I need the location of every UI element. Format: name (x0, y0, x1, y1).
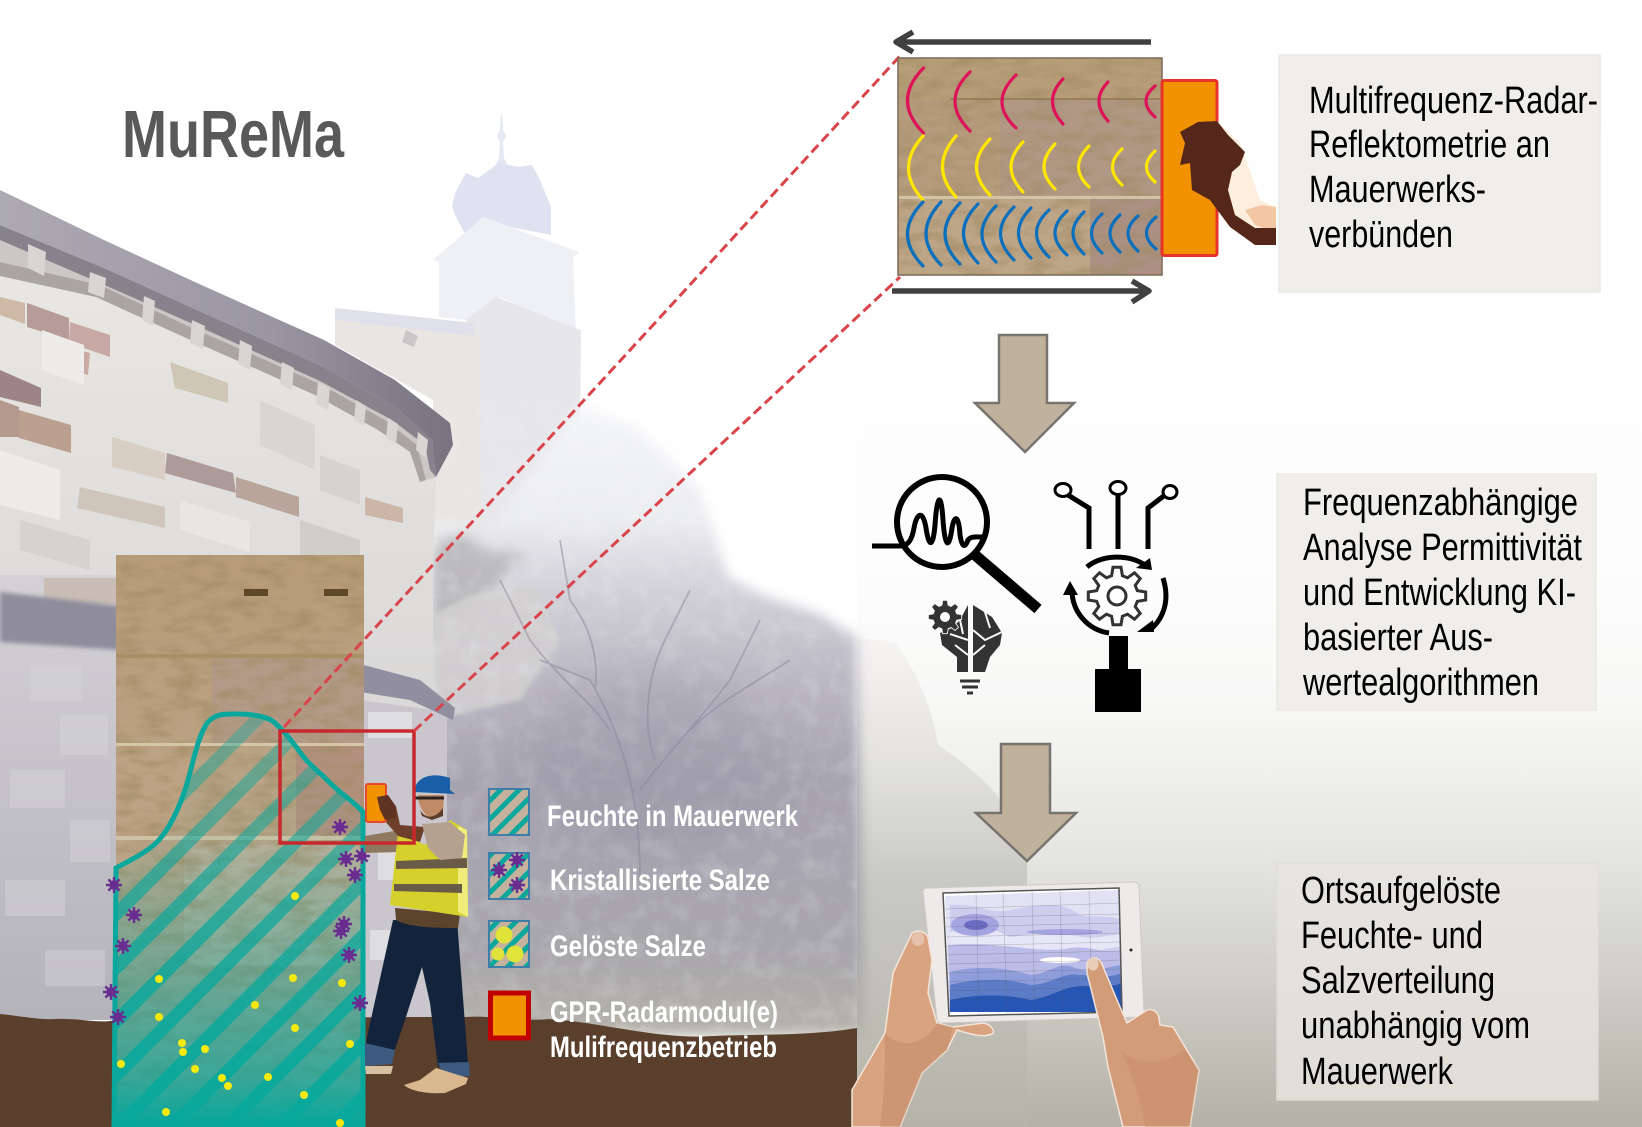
arrow: down 1 (975, 335, 1074, 452)
zoom projection lines (284, 56, 900, 731)
text box: radar reflectometry: verbünden (1309, 214, 1453, 256)
frieze band (0, 225, 436, 480)
lower bastion (360, 700, 447, 1020)
text box: analysis (1277, 474, 1596, 710)
bulb base (960, 681, 980, 693)
belt (395, 908, 460, 928)
legend: dissolved salts (489, 921, 706, 967)
blue waves (908, 202, 1156, 266)
left hemisphere (940, 605, 968, 672)
dissolved salts (117, 892, 354, 1127)
stone blocks (116, 555, 364, 1127)
tower spire (495, 110, 508, 166)
tree branches (500, 540, 790, 880)
hand (377, 795, 396, 820)
lower tower (466, 297, 581, 540)
right hemisphere (973, 605, 1002, 672)
upper tower body (433, 217, 579, 335)
right hand (1087, 958, 1199, 1127)
legend: radar module (490, 993, 778, 1064)
right fingertip (1088, 958, 1098, 970)
icon: circuit with gear (1055, 482, 1177, 712)
vest (390, 820, 468, 917)
text box: analysis: wertealgorithmen (1302, 662, 1539, 704)
fog shadow behind wall (433, 532, 525, 640)
small radar module (366, 784, 386, 822)
text box: analysis: basierter Aus- (1303, 617, 1493, 659)
legend: crystallized salts (489, 852, 770, 899)
left thumb (912, 932, 924, 946)
lower left wall (0, 575, 120, 1020)
yellow waves (908, 136, 1155, 200)
red waves (908, 68, 1155, 133)
face (418, 795, 444, 818)
vest stripes (394, 858, 467, 893)
legend: moisture: Feuchte in Mauerwerk (547, 800, 798, 833)
tower dome (452, 163, 551, 236)
arrow: scan right (892, 281, 1149, 302)
moisture zone (112, 712, 366, 1127)
text box: radar reflectometry: Reflektometrie an (1309, 124, 1550, 166)
text box: analysis: Frequenzabhängige (1303, 482, 1578, 524)
icon: AI brain (928, 600, 1002, 693)
crystallized salts (103, 819, 370, 1025)
tree blob (520, 670, 780, 850)
main curved wall (0, 225, 436, 720)
raised arm (384, 800, 425, 842)
moulding band (0, 262, 426, 482)
legend (489, 789, 798, 1064)
legend: radar module: Mulifrequenzbetrieb (550, 1031, 777, 1064)
text box: radar reflectometry: Mauerwerks- (1309, 169, 1486, 211)
trouser cuffs (365, 1043, 470, 1078)
brain folds (950, 612, 1002, 655)
arrow: down 2 (976, 744, 1076, 861)
text box: result: Feuchte- und (1301, 915, 1483, 957)
text box: analysis: Analyse Permittivität (1303, 527, 1582, 569)
radar wall sample (898, 58, 1162, 275)
hill mist (430, 405, 865, 1035)
stones (0, 297, 403, 580)
brain gear (928, 600, 962, 634)
patterned sleeve (422, 822, 465, 860)
radar module (1162, 80, 1217, 256)
helmet (414, 775, 455, 794)
castle background (0, 110, 865, 1035)
ground (0, 1014, 857, 1127)
corbels (28, 244, 428, 458)
text box: analysis: und Entwicklung KI- (1303, 572, 1576, 614)
lower sleeve (365, 830, 400, 853)
icon: magnifier with signal (872, 477, 1038, 609)
roof (0, 190, 453, 477)
legend: dissolved salts: Gelöste Salze (550, 930, 706, 963)
trousers (365, 920, 468, 1067)
text box: result: unabhängig vom (1301, 1005, 1530, 1047)
side building (335, 308, 482, 540)
right hand shadow (1120, 1050, 1199, 1127)
screen bezel (943, 888, 1122, 1016)
tree silhouette band (857, 637, 1027, 1127)
red measurement frame (280, 731, 414, 843)
worker (365, 775, 470, 1093)
right background panel (857, 0, 1642, 1127)
lower stone wall in mist (433, 585, 560, 720)
tablet with hands (852, 882, 1199, 1127)
arrow: scan left (896, 32, 1151, 52)
frieze shadow (0, 225, 436, 477)
fog mottling (433, 400, 857, 1030)
legend: radar module: GPR-Radarmodul(e) (550, 996, 778, 1029)
camera dot (1130, 948, 1132, 952)
text box: result: Salzverteilung (1301, 960, 1495, 1002)
legend: crystallized salts: Kristallisierte Salze (550, 864, 770, 897)
wall cross section (116, 555, 364, 1127)
text box: result: Mauerwerk (1301, 1051, 1454, 1093)
tablet body (923, 882, 1144, 1023)
legend: moisture (489, 789, 798, 835)
text box: result (1277, 863, 1598, 1100)
left hand shadow (880, 1023, 953, 1127)
shoe right (404, 1068, 468, 1093)
shoe left (365, 1066, 393, 1074)
contour chart screen (944, 889, 1122, 1016)
text box: radar reflectometry (1279, 55, 1600, 292)
title: MuReMa (122, 97, 345, 172)
left hand (852, 931, 994, 1127)
text box: result: Ortsaufgelöste (1301, 870, 1501, 912)
hand on module (1180, 121, 1276, 245)
